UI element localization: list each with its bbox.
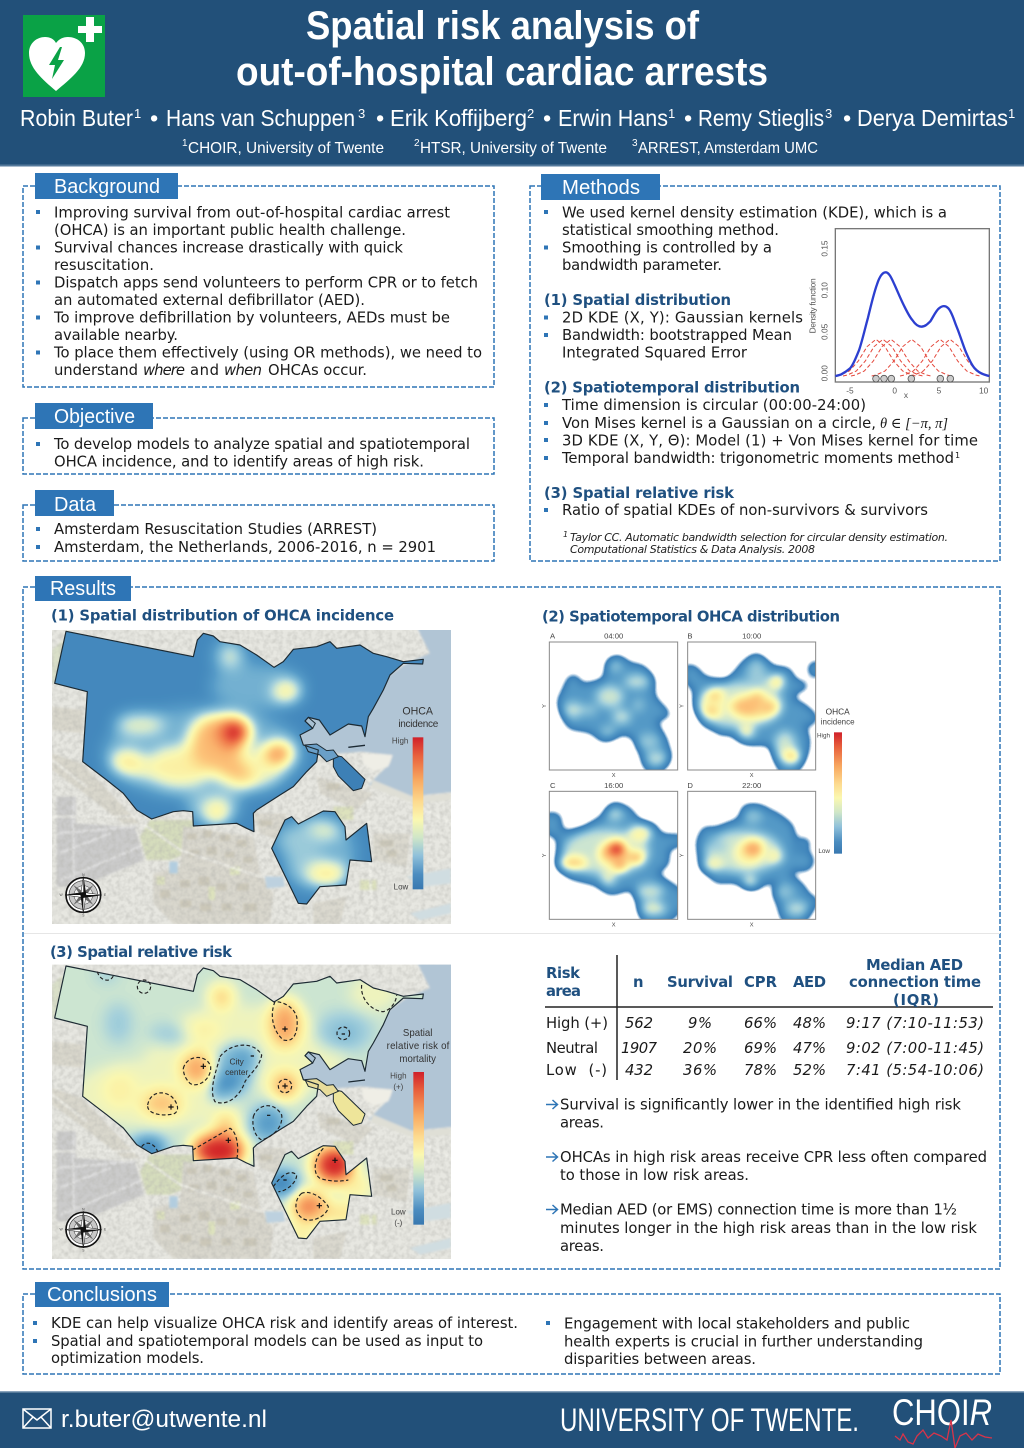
heading: data xyxy=(35,490,114,516)
D xyxy=(697,805,820,923)
chart: kernel density plot: 0.15 xyxy=(819,240,829,257)
background bullet list: To improve defibrillation by volunteers, AEDs must be xyxy=(53,310,450,326)
panel: methods xyxy=(530,174,1000,561)
panel captions: 16:00 xyxy=(604,781,623,790)
authors: Erwin Hans xyxy=(558,105,668,131)
icon: compass rose xyxy=(60,873,107,918)
background bullet list: an automated external defibrillator (AED). xyxy=(54,292,365,309)
background bullet list: available nearby. xyxy=(54,327,178,344)
logo: CHOIR: CHOIR xyxy=(892,1392,992,1433)
chart: kernel density plot: Density function xyxy=(807,278,817,333)
finding 1: areas. xyxy=(560,1114,604,1132)
row: high: 48% xyxy=(793,1015,826,1032)
chart: kernel density plot: 0 xyxy=(892,385,897,395)
row: neutral: 69% xyxy=(744,1040,777,1057)
map legend: Low xyxy=(394,882,409,891)
authors: • xyxy=(543,105,551,131)
authors xyxy=(20,105,1015,131)
methods section 1: Integrated Squared Error xyxy=(562,344,748,362)
row: neutral: 20% xyxy=(683,1040,717,1057)
table header: connection time xyxy=(849,974,981,991)
conclusions right column: health experts is crucial in further understanding xyxy=(564,1334,923,1350)
methods section 1 xyxy=(544,292,803,362)
label: city center: City xyxy=(229,1057,245,1067)
table header: Risk xyxy=(546,965,581,982)
chart: kernel density plot xyxy=(807,229,990,400)
authors: • xyxy=(684,105,692,131)
row: neutral xyxy=(546,1040,984,1057)
panel captions: A xyxy=(550,632,556,641)
shared legend: Low xyxy=(818,848,830,855)
risk markers xyxy=(168,1026,345,1208)
affiliations: 3 xyxy=(632,138,638,149)
map legend: incidence xyxy=(398,719,439,730)
panel captions: Y xyxy=(680,704,686,708)
map: spatial OHCA incidence xyxy=(52,630,451,924)
logo: University of Twente: UNIVERSITY OF TWENTE. xyxy=(560,1402,859,1438)
background bullet list: (OHCA) is an important public health challenge. xyxy=(54,222,406,239)
panel captions xyxy=(542,632,761,928)
map legend xyxy=(392,706,439,891)
panel captions: X xyxy=(750,773,754,779)
heading: results xyxy=(35,576,131,601)
panel captions: X xyxy=(750,922,754,928)
chart: kernel density plot: -5 xyxy=(846,385,854,395)
row: low: 52% xyxy=(793,1062,826,1079)
chart: kernel density plot: 0.05 xyxy=(819,323,829,340)
A xyxy=(557,656,671,772)
row: low: 432 xyxy=(625,1062,653,1079)
row: low: 7:41 (5:54-10:06) xyxy=(846,1062,984,1079)
heading: objective xyxy=(35,403,153,429)
map legend: mortality xyxy=(399,1054,436,1065)
affiliations: HTSR, University of Twente xyxy=(420,140,607,157)
panels heat surfaces xyxy=(550,652,816,919)
heading: data: Data xyxy=(54,494,97,516)
finding 3: areas. xyxy=(560,1238,604,1255)
methods intro xyxy=(544,204,947,274)
methods intro: statistical smoothing method. xyxy=(562,222,779,239)
chart: kernel density plot: 0.00 xyxy=(819,365,829,381)
row: high: 9:17 (7:10-11:53) xyxy=(846,1015,984,1032)
chart: kernel density plot: x xyxy=(904,390,909,400)
footer band xyxy=(0,1391,1024,1448)
background bullet list: where xyxy=(143,362,185,379)
heading: conclusions: Conclusions xyxy=(47,1284,157,1306)
label: city center: center xyxy=(225,1067,248,1077)
authors: • xyxy=(150,105,158,131)
authors: Derya Demirtas xyxy=(857,105,1008,131)
row: low: 36% xyxy=(683,1062,717,1079)
heading: methods xyxy=(541,174,660,200)
panel frames xyxy=(549,642,816,919)
panel captions: B xyxy=(687,632,692,641)
small multiples: spatiotemporal maps xyxy=(542,634,854,926)
table header: CPR xyxy=(744,974,778,991)
row: neutral: 9:02 (7:00-11:45) xyxy=(846,1040,984,1057)
authors: • xyxy=(376,105,384,131)
icon: compass rose: S xyxy=(82,914,85,918)
panel captions: Y xyxy=(680,853,686,857)
conclusions left column: Spatial and spatiotemporal models can be used as input to xyxy=(51,1333,483,1350)
contact email: r.buter@utwente.nl xyxy=(61,1406,267,1433)
row: high: 9% xyxy=(688,1015,712,1032)
map legend: High xyxy=(392,737,408,746)
authors: Erik Koffijberg xyxy=(390,105,527,131)
conclusions left column xyxy=(33,1315,518,1367)
panel captions: X xyxy=(612,773,616,779)
heading: objective: Objective xyxy=(54,406,135,428)
background bullet list: when xyxy=(224,362,262,379)
panel captions: X xyxy=(612,922,616,928)
methods section 1: (1) Spatial distribution xyxy=(544,292,731,309)
row: high xyxy=(546,1015,984,1032)
row: neutral: Neutral xyxy=(546,1040,598,1057)
table header: AED xyxy=(793,974,826,991)
data text: Amsterdam Resuscitation Studies (ARREST) xyxy=(54,521,377,538)
panel captions: D xyxy=(687,781,693,790)
objective text: To develop models to analyze spatial and spatiotemporal xyxy=(53,436,470,453)
objective text: OHCA incidence, and to identify areas of high risk. xyxy=(54,454,424,470)
methods section 1: 2D KDE (X, Y): Gaussian kernels xyxy=(562,310,803,326)
title: out-of-hospital cardiac arrests xyxy=(236,50,768,94)
methods section 2: Time dimension is circular (00:00-24:00) xyxy=(561,397,866,414)
methods intro: bandwidth parameter. xyxy=(562,257,722,274)
subheading 2: (2) Spatiotemporal OHCA distribution xyxy=(542,608,840,626)
finding 1 xyxy=(546,1096,961,1132)
chart: kernel density plot: 10 xyxy=(979,385,989,395)
background bullet list: and xyxy=(190,362,219,379)
label: city center xyxy=(226,1058,248,1075)
methods section 2 xyxy=(544,380,978,467)
finding 3: Median AED (or EMS) connection time is more than 1½ xyxy=(560,1202,957,1218)
row: low: 78% xyxy=(744,1062,777,1079)
background bullet list: Survival chances increase drastically with quick xyxy=(54,240,403,256)
methods section 2: θ ∈ [−π, π] xyxy=(880,416,948,432)
map legend: relative risk of xyxy=(387,1041,450,1052)
affiliations: 2 xyxy=(414,138,420,149)
finding 2 xyxy=(546,1149,987,1184)
authors: 1 xyxy=(668,106,675,121)
background bullet list: Improving survival from out-of-hospital cardiac arrest xyxy=(54,204,450,222)
methods intro: We used kernel density estimation (KDE), which is a xyxy=(562,204,947,222)
title xyxy=(236,4,768,94)
row: low xyxy=(546,1062,984,1079)
row: neutral: 1907 xyxy=(621,1040,658,1057)
finding 3 xyxy=(546,1202,977,1255)
affiliations: ARREST, Amsterdam UMC xyxy=(638,140,818,157)
methods section 1: Bandwidth: bootstrapped Mean xyxy=(562,327,792,344)
methods section 3: (3) Spatial relative risk xyxy=(544,485,735,502)
panel captions: Y xyxy=(542,853,548,857)
icon: compass rose: N xyxy=(82,873,85,877)
row: high: 66% xyxy=(744,1015,777,1032)
row: low: Low (-) xyxy=(546,1062,607,1079)
authors: Remy Stieglis xyxy=(698,105,824,131)
panel: results xyxy=(22,576,1001,1270)
heading: methods: Methods xyxy=(562,177,640,199)
methods section 3: Ratio of spatial KDEs of non-survivors & survivors xyxy=(562,502,928,519)
footnote: Computational Statistics & Data Analysis. 2008 xyxy=(570,543,815,556)
icon: compass rose: W xyxy=(60,1228,64,1232)
table header: area xyxy=(546,983,581,1000)
shared legend xyxy=(817,706,855,855)
icon: AED heart logo xyxy=(23,15,105,97)
finding 2: to those in low risk areas. xyxy=(560,1167,749,1184)
risk area dashed contours xyxy=(97,972,397,1220)
map legend xyxy=(387,1028,450,1227)
table header: n xyxy=(633,974,644,991)
background bullet list: understand xyxy=(54,362,138,379)
heading: results: Results xyxy=(50,578,116,600)
heading: background: Background xyxy=(54,176,160,198)
affiliations: 1 xyxy=(182,138,188,149)
conclusions right column: Engagement with local stakeholders and public xyxy=(564,1316,910,1332)
authors: • xyxy=(843,105,851,131)
panel captions: 10:00 xyxy=(742,632,761,641)
table header: (IQR) xyxy=(893,992,939,1009)
authors: Robin Buter xyxy=(20,105,133,131)
icon: envelope xyxy=(23,1409,51,1428)
panel captions: 22:00 xyxy=(742,781,761,790)
authors: 3 xyxy=(358,106,365,121)
background bullet list: resuscitation. xyxy=(54,257,154,274)
icon: compass rose: E xyxy=(104,893,107,897)
harbour xyxy=(333,755,365,791)
methods section 2: Von Mises kernel is a Gaussian on a circle, xyxy=(562,415,876,432)
conclusions right column xyxy=(546,1316,923,1368)
footnote: Taylor CC. Automatic bandwidth selection for circular density estimation. xyxy=(570,531,948,544)
background bullet list: To place them effectively (using OR methods), we need to xyxy=(53,344,482,362)
data text xyxy=(36,521,436,556)
panel captions: Y xyxy=(542,704,548,708)
map legend: (+) xyxy=(393,1082,404,1091)
icon: compass rose xyxy=(60,1208,107,1252)
panel: data xyxy=(23,490,494,561)
methods section 2: 3D KDE (X, Y, Θ): Model (1) + Von Mises kernel for time xyxy=(562,432,978,450)
table header: Survival xyxy=(667,974,733,991)
finding 3: minutes longer in the high risk areas than in the low risk xyxy=(560,1220,977,1237)
incidence heat surface xyxy=(55,632,423,904)
row: high: 562 xyxy=(625,1015,653,1032)
map legend: Spatial xyxy=(403,1028,432,1039)
shared legend: High xyxy=(817,732,830,739)
methods section 3 xyxy=(544,485,928,519)
conclusions right column: disparities between areas. xyxy=(564,1351,756,1368)
authors: 1 xyxy=(1008,106,1015,121)
map: spatial relative risk xyxy=(52,964,451,1259)
map legend: Low xyxy=(391,1207,406,1216)
methods section 2: 1 xyxy=(955,451,960,460)
conclusions left column: KDE can help visualize OHCA risk and identify areas of interest. xyxy=(51,1315,518,1332)
methods section 2: Temporal bandwidth: trigonometric moments method xyxy=(561,450,954,467)
C xyxy=(543,802,683,923)
shared legend: OHCA xyxy=(826,706,850,716)
background bullet list: OHCAs occur. xyxy=(268,362,367,379)
finding 2: OHCAs in high risk areas receive CPR less often compared xyxy=(560,1149,987,1166)
relative risk heat surface xyxy=(56,966,422,1238)
objective text xyxy=(36,436,470,470)
chart: kernel density plot: 0.10 xyxy=(819,282,829,298)
background bullet list: Dispatch apps send volunteers to perform CPR or to fetch xyxy=(54,274,478,292)
table header: Median AED xyxy=(866,957,963,974)
icon: compass rose: W xyxy=(60,893,64,897)
panel: background xyxy=(23,173,494,387)
row: neutral: 47% xyxy=(793,1040,826,1057)
finding 1: Survival is significantly lower in the identified high risk xyxy=(560,1096,961,1114)
harbour xyxy=(333,1090,365,1125)
icon: compass rose: N xyxy=(82,1208,85,1212)
table header xyxy=(546,957,981,1009)
methods section 2: (2) Spatiotemporal distribution xyxy=(544,380,800,396)
subheading 3: (3) Spatial relative risk xyxy=(50,944,233,961)
authors: 3 xyxy=(825,106,832,121)
B xyxy=(683,653,809,773)
authors: Hans van Schuppen xyxy=(166,105,355,131)
heading: background xyxy=(35,173,178,199)
header band xyxy=(0,0,1024,166)
row: high: High (+) xyxy=(546,1015,608,1032)
map legend: (-) xyxy=(394,1218,403,1227)
shared legend: incidence xyxy=(821,717,855,726)
footnote: 1 xyxy=(563,530,568,539)
icon: compass rose: S xyxy=(82,1248,85,1252)
title: Spatial risk analysis of xyxy=(306,4,700,48)
conclusions left column: optimization models. xyxy=(51,1350,204,1367)
affiliations: CHOIR, University of Twente xyxy=(188,140,384,157)
data text: Amsterdam, the Netherlands, 2006-2016, n = 2901 xyxy=(54,539,436,556)
subheading 1: (1) Spatial distribution of OHCA incidence xyxy=(51,608,394,624)
panel captions: C xyxy=(550,781,556,790)
affiliations xyxy=(182,138,818,157)
authors: 2 xyxy=(527,106,534,121)
map legend: High xyxy=(390,1072,407,1081)
background bullet list xyxy=(36,204,482,379)
chart: kernel density plot: 5 xyxy=(937,385,942,395)
panel captions: 04:00 xyxy=(604,632,623,641)
table: risk area statistics xyxy=(545,955,993,1080)
map legend: OHCA xyxy=(402,706,434,718)
icon: compass rose: E xyxy=(104,1228,107,1232)
methods intro: Smoothing is controlled by a xyxy=(562,240,772,256)
panel: conclusions xyxy=(23,1282,1000,1374)
footnote xyxy=(563,530,948,556)
panel: objective xyxy=(23,403,494,474)
authors: 1 xyxy=(134,106,141,121)
